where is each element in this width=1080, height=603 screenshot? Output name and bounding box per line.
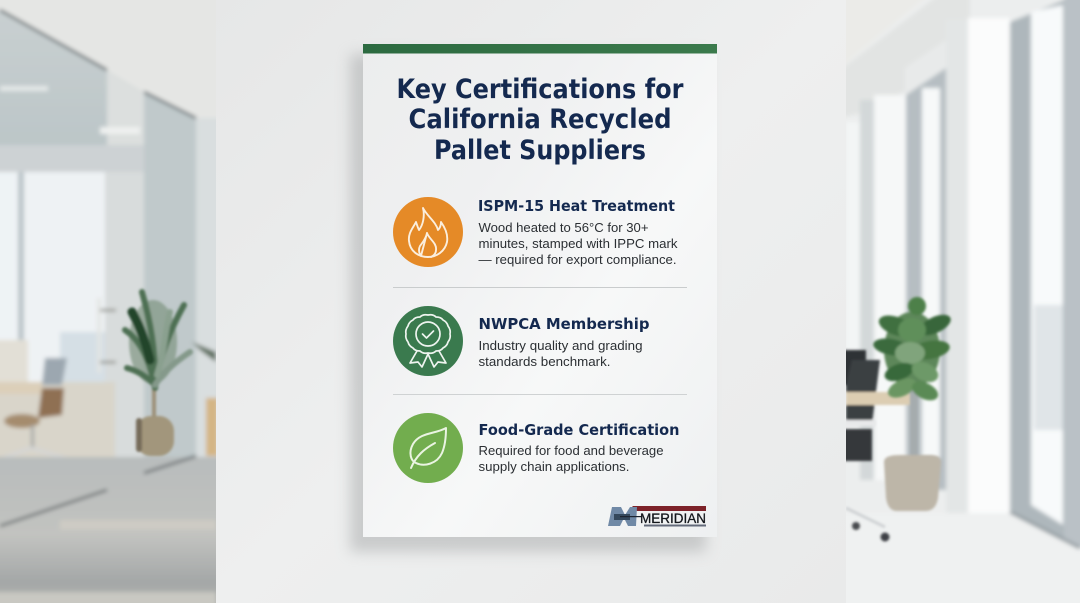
description (478, 220, 678, 267)
wall (216, 0, 846, 603)
icon: leaf (393, 413, 463, 483)
description (478, 443, 664, 474)
left office background (0, 0, 226, 603)
logo: Meridian (608, 506, 706, 526)
description (478, 338, 642, 369)
description: supply chain applications. (478, 459, 630, 474)
logo: Meridian: MERIDIAN (640, 510, 706, 526)
icon: award rosette (393, 306, 463, 376)
heading: Food-Grade Certification (478, 421, 680, 439)
right office background (846, 0, 1080, 550)
title: Key Certifications for (396, 74, 684, 105)
description: Industry quality and grading (478, 338, 642, 353)
heading: ISPM-15 Heat Treatment (478, 197, 676, 215)
panel shadow (350, 54, 706, 552)
icon: flame (393, 197, 463, 267)
description: Required for food and beverage (478, 443, 664, 458)
left potted plant (125, 292, 190, 456)
title: California Recycled (408, 104, 672, 135)
heading: NWPCA Membership (478, 315, 650, 333)
description: standards benchmark. (478, 354, 610, 369)
item: ISPM-15 heat treatment (393, 197, 678, 267)
right chair and desk (840, 350, 912, 542)
description: Wood heated to 56°C for 30+ (478, 220, 648, 235)
item: food-grade certification (393, 413, 680, 483)
title: Pallet Suppliers (434, 135, 646, 166)
poster panel (363, 44, 717, 537)
top green bar (363, 44, 717, 54)
right potted plant (872, 297, 954, 511)
item: NWPCA membership (393, 306, 650, 376)
description: minutes, stamped with IPPC mark (478, 236, 678, 251)
description: — required for export compliance. (478, 252, 676, 267)
title (396, 74, 684, 166)
